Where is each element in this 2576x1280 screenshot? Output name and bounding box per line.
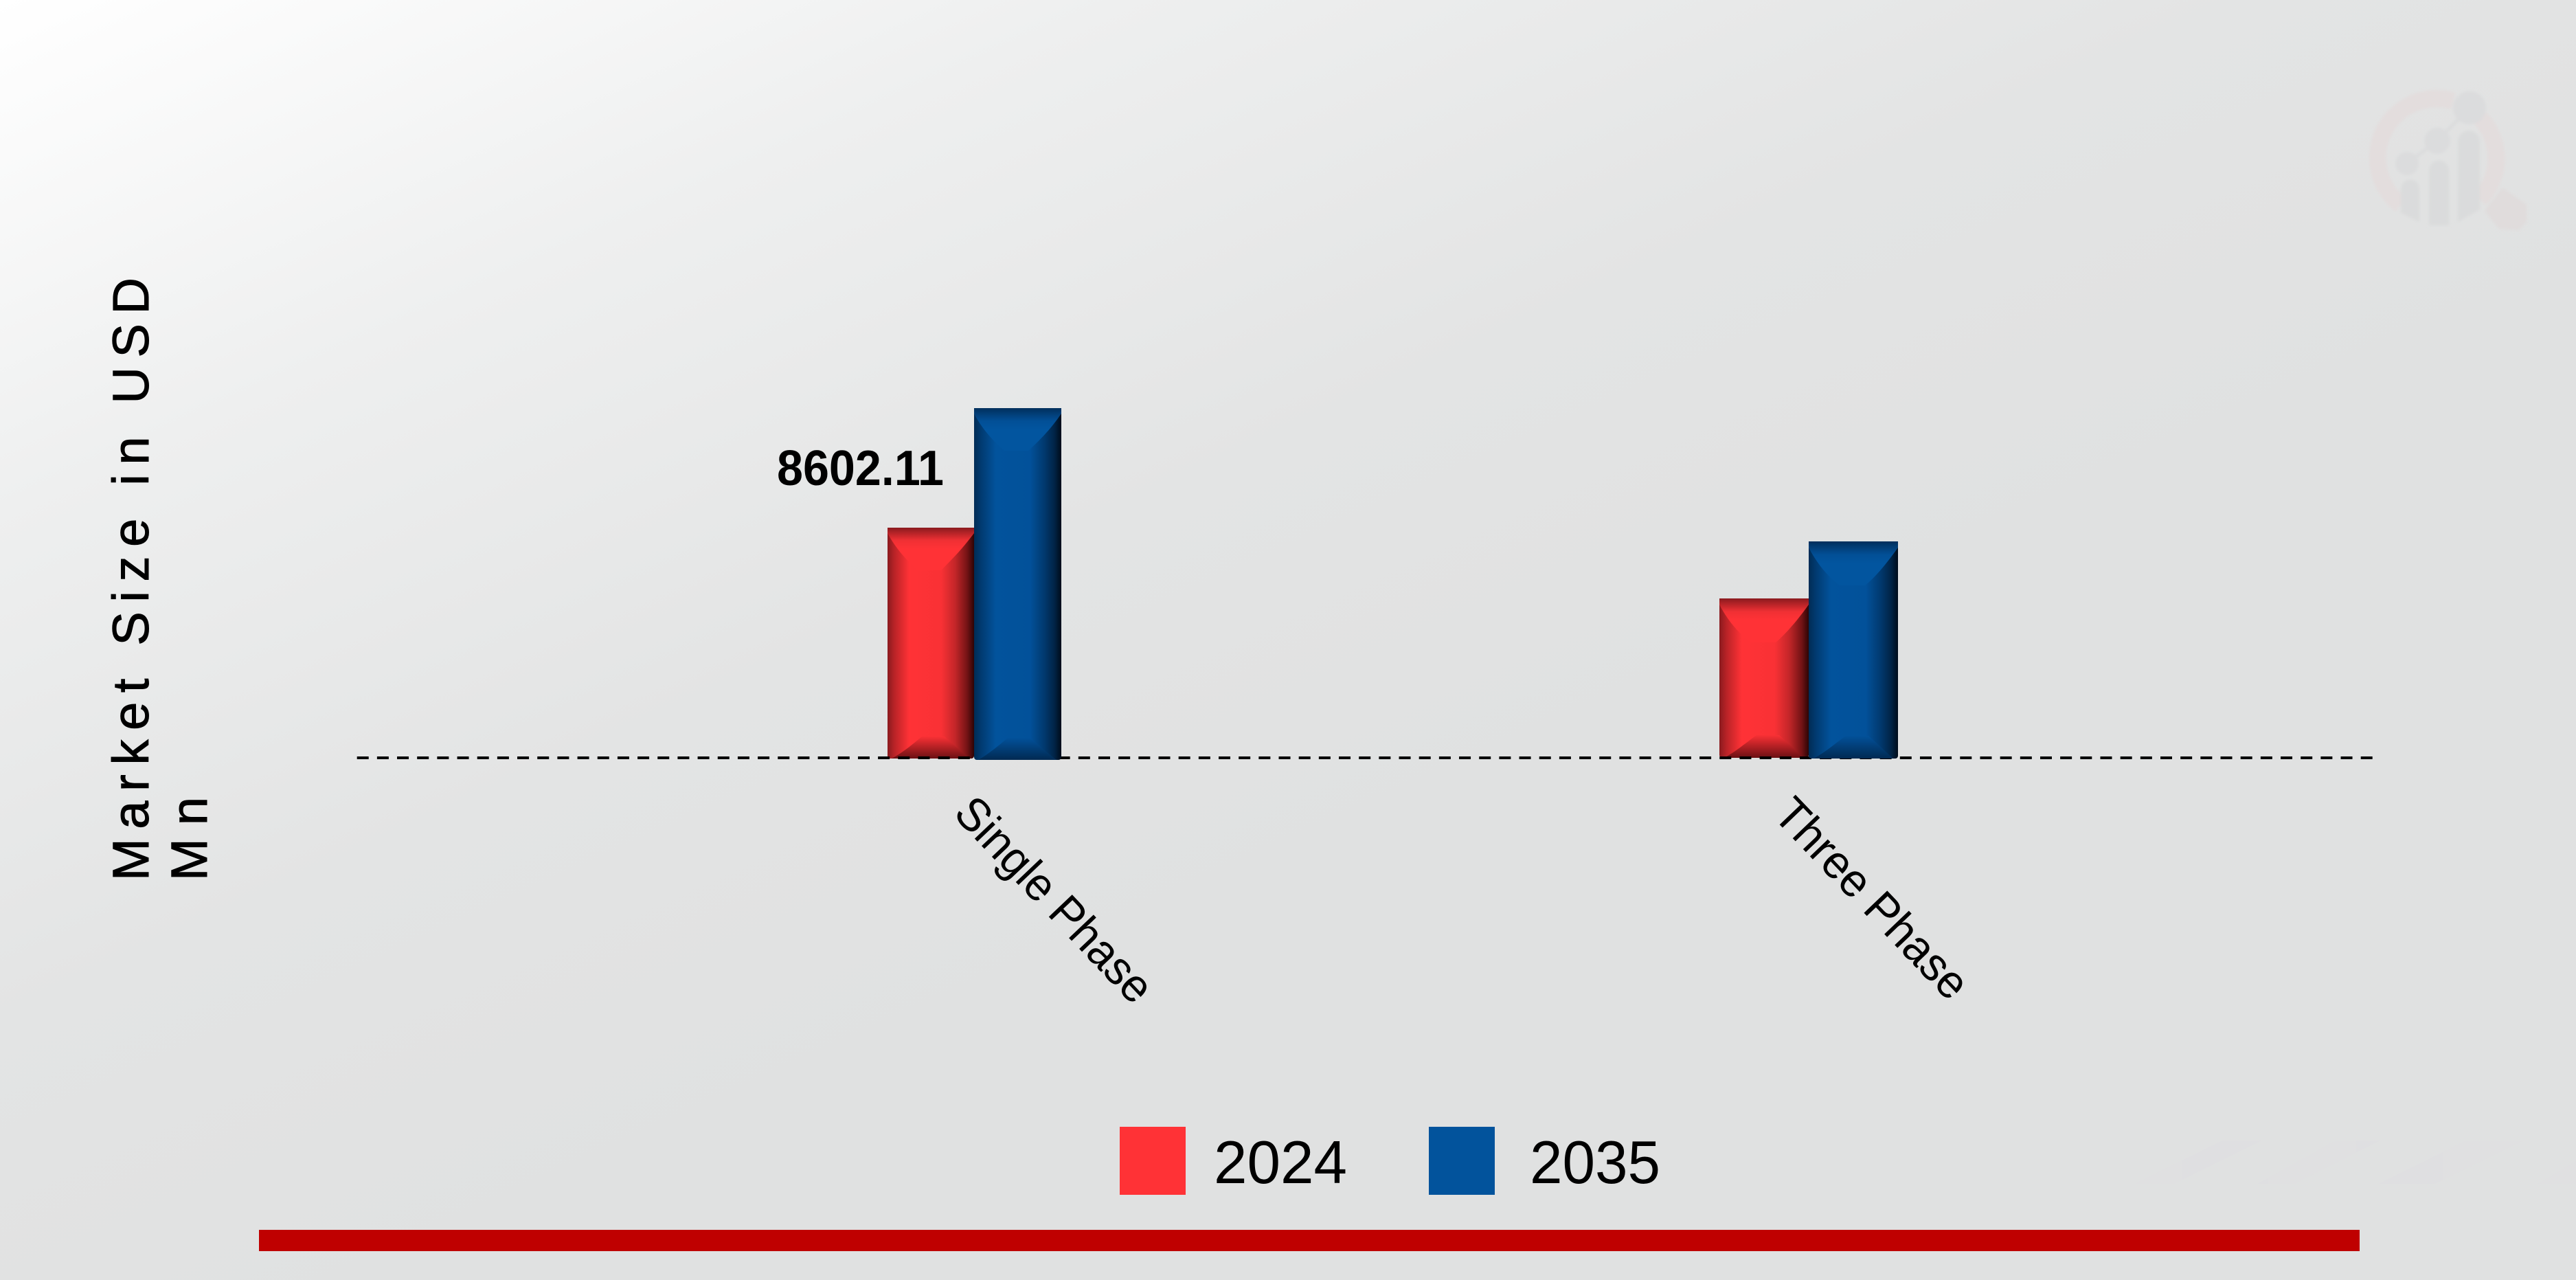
- legend text 2035: 2035: [1530, 1128, 1660, 1196]
- legend: [1120, 1127, 1660, 1196]
- legend swatch 2035: [1429, 1127, 1495, 1195]
- category label: Single Phase: Single Phase: [945, 786, 1164, 1013]
- y-axis title: Market Size in USD: [102, 278, 159, 881]
- watermark logo: [2377, 91, 2527, 230]
- category label: Three Phase: Three Phase: [1764, 787, 1980, 1009]
- y-axis title: [102, 278, 218, 881]
- data label: 8602.11: 8602.11: [777, 441, 944, 496]
- legend swatch 2024: [1120, 1127, 1186, 1195]
- bottom red bar: [259, 1230, 2360, 1251]
- bar: Three Phase 2035: [1809, 541, 1898, 759]
- bar: Three Phase 2024: [1719, 598, 1809, 758]
- bar: Single Phase 2024: [888, 528, 974, 759]
- y-axis title: Mn: [161, 797, 218, 881]
- bar: Single Phase 2035: [974, 408, 1061, 760]
- legend text 2024: 2024: [1214, 1128, 1347, 1196]
- axis baseline (dashed): [357, 756, 2375, 759]
